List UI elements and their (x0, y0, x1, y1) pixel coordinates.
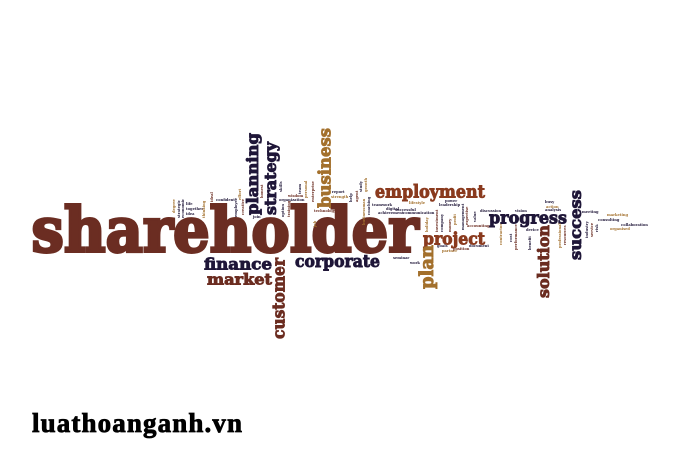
small vertical words: money (448, 218, 452, 232)
small words cluster: confident (216, 198, 235, 202)
small words cluster: together (186, 207, 203, 211)
small words cluster: action (546, 205, 559, 209)
small vertical words: job (313, 220, 317, 228)
word: employment: employment (375, 182, 486, 202)
small vertical words: ideal (210, 192, 214, 202)
small vertical words: training (287, 200, 291, 217)
main word: shareholder: shareholder (32, 194, 420, 266)
small words cluster: accounting (467, 224, 490, 228)
small vertical words: cost (509, 233, 513, 242)
small vertical words: employee (234, 197, 238, 217)
small vertical words: thinking (202, 200, 206, 218)
small vertical words: team (298, 184, 302, 194)
small vertical words: creative (241, 198, 245, 215)
small words cluster: join (252, 215, 261, 219)
small vertical words (172, 177, 599, 250)
small vertical words: resources (563, 225, 567, 245)
small words cluster: seminar (393, 256, 409, 260)
small words cluster: achievement (378, 211, 404, 215)
small words cluster: partner (442, 249, 457, 253)
small words cluster: life (186, 202, 193, 206)
word: market: market (207, 270, 272, 288)
small vertical words: economic (181, 198, 185, 218)
small words cluster: power (445, 199, 457, 203)
small vertical words: professional (558, 223, 562, 248)
word: finance: finance (204, 254, 272, 274)
small words cluster: leadership (439, 203, 461, 207)
small words cluster: collaboration (621, 223, 648, 227)
small words cluster: technology (314, 209, 337, 213)
small vertical words: enterprise (311, 180, 315, 202)
small words cluster: organization (279, 198, 305, 202)
small words cluster: document (469, 244, 489, 248)
small vertical words: risk (595, 224, 599, 232)
small words cluster: marketing (607, 213, 628, 217)
small vertical words: skills (279, 181, 283, 192)
small vertical words: strategic (177, 199, 181, 218)
small vertical words: profit (453, 214, 457, 225)
small words cluster: lifestyle (409, 201, 426, 205)
word: progress: progress (489, 208, 567, 228)
small vertical words: help (349, 193, 353, 202)
small vertical words: degree (172, 199, 176, 213)
small words cluster: strength (331, 195, 349, 199)
footer website name: luathoanganh.vn (32, 408, 242, 438)
small words cluster: work (409, 261, 420, 265)
small vertical words: effort (238, 188, 242, 200)
word: strategy: strategy (261, 141, 280, 215)
small vertical words: benefit (528, 236, 532, 250)
word: planning: planning (243, 133, 262, 215)
small vertical words: coaching (367, 196, 371, 215)
small words cluster: communication (403, 211, 435, 215)
small vertical words: study (359, 180, 363, 192)
small words cluster: discussion (480, 209, 502, 213)
small words cluster: meeting (582, 210, 599, 214)
small words cluster: goals (437, 244, 448, 248)
small words cluster: analysis (545, 208, 561, 212)
small vertical words: performance (514, 224, 518, 250)
word: success: success (566, 190, 585, 260)
small vertical words: personal (304, 180, 308, 198)
word: corporate: corporate (295, 252, 380, 272)
small vertical words: expertise (465, 206, 469, 225)
small vertical words: agent (355, 190, 359, 202)
small words cluster: wisdom (287, 194, 303, 198)
small words cluster: vision (514, 209, 527, 213)
small vertical words: management (461, 203, 465, 230)
small words cluster: organised (610, 227, 630, 231)
small vertical words: investment (435, 209, 439, 232)
small vertical words: company (440, 213, 444, 232)
word: plan: plan (416, 245, 438, 289)
large words group (204, 128, 585, 339)
word: solution: solution (534, 225, 553, 298)
small words cluster: digital (386, 207, 400, 211)
word: project: project (423, 230, 485, 250)
small vertical words: businessman (362, 198, 366, 225)
small words cluster: idea (186, 212, 195, 216)
small vertical words: honest (260, 184, 264, 198)
small words cluster: consulting (598, 218, 620, 222)
small vertical words: service (590, 222, 594, 237)
small words cluster: report (332, 190, 345, 194)
small vertical words: contractor (499, 224, 503, 245)
small words cluster: busy (545, 200, 555, 204)
small words cluster: successful (395, 208, 417, 212)
small vertical words: growth (364, 177, 368, 192)
word: business: business (316, 128, 336, 208)
small words cluster: teamwork (372, 203, 392, 207)
small vertical words: holiday (425, 216, 429, 232)
small words cluster: device (526, 228, 539, 232)
word: customer: customer (270, 257, 290, 339)
small words cluster (186, 190, 648, 265)
small vertical words: value (473, 211, 477, 223)
small vertical words: industry (585, 220, 589, 238)
small vertical words: option (281, 204, 285, 217)
small words cluster: position (453, 247, 470, 251)
